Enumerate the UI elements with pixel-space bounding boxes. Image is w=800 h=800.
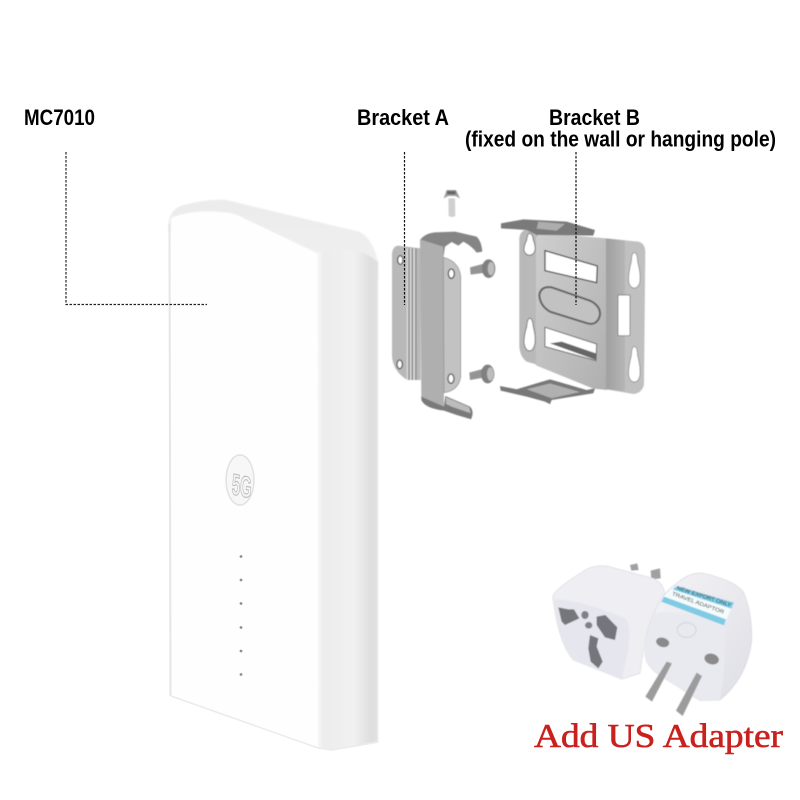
terminals (655, 636, 670, 649)
leader line: MC7010 (66, 152, 207, 304)
adapter: US plug side: NEW EXPORT ONLY (676, 586, 732, 609)
icon: 5G badge: 5G (231, 468, 252, 504)
bracket A (392, 232, 482, 419)
bracket A left flange (392, 246, 421, 380)
rivets (469, 259, 495, 383)
router body side (317, 249, 378, 750)
screw (444, 190, 460, 217)
bracket A top tab (420, 232, 482, 258)
adapter: US plug side (645, 573, 752, 716)
socket holes (558, 607, 579, 625)
router MC7010 (168, 200, 378, 750)
bracket B centre embossing (539, 287, 600, 324)
bracket B left flange (519, 229, 538, 365)
rear prongs (630, 563, 661, 579)
blades (645, 662, 672, 702)
bracket A right flange (443, 257, 461, 393)
label: MC7010: MC7010 (24, 105, 95, 130)
bracket A bottom tab (421, 396, 473, 419)
leader line: Bracket B (575, 152, 577, 305)
router top edge (168, 200, 378, 280)
bracket B (500, 219, 645, 404)
LED indicators (240, 555, 242, 676)
router front face (171, 211, 318, 748)
socket body (553, 566, 665, 679)
bracket B main plate (536, 234, 607, 390)
bracket B upper slot (545, 251, 597, 283)
leader line: Bracket A (404, 152, 406, 305)
bracket B bottom tab (500, 379, 595, 404)
icon: 5G badge (226, 455, 254, 505)
bracket B side panel (606, 238, 645, 394)
bracket B lower slot (545, 327, 597, 361)
warning label (661, 586, 734, 625)
label: Bracket B: Bracket B (549, 105, 640, 130)
adapter caption: Add US Adapter (534, 718, 784, 755)
label: Bracket A: Bracket A (357, 105, 449, 130)
bracket A channel (420, 239, 444, 410)
adapter: universal socket side (553, 563, 665, 679)
adapter: US plug side: TRAVEL ADAPTOR (671, 591, 725, 616)
bracket B top tab (501, 219, 595, 236)
plug body (645, 573, 752, 701)
